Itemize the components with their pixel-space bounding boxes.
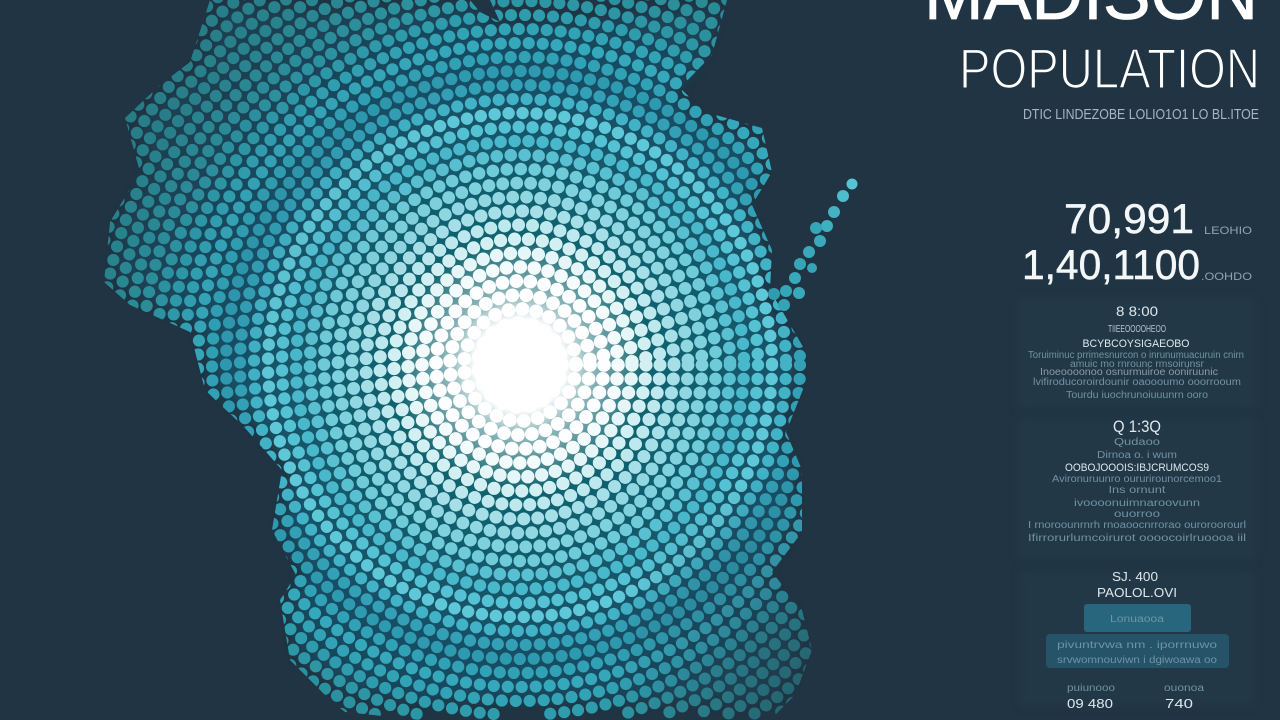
panel: first text block [1018,298,1256,410]
panel body text: Ins ornunt [1108,485,1166,496]
upper left fade [171,116,278,216]
panel body text: Toruiminuc prrimesnurcon o inrunumuacuruin cnirn [1028,350,1244,361]
panel heading: PAOLOL.OVI [1097,585,1177,600]
panel background [1020,570,1254,706]
stat: 70,991: 70,991 [1064,195,1194,242]
panel heading: BCYBCOYSIGAEOBO [1082,338,1190,350]
teal button: Lonuaooa [1110,614,1165,625]
panel heading: OOBOJOOOIS:IBJCRUMCOS9 [1065,462,1209,474]
headline statistics [1022,195,1252,288]
panel body text: Avironuruunro oururirounorcemoo1 [1052,474,1222,485]
title block [924,0,1260,123]
bottom stat right [1164,683,1205,711]
panel background [1018,298,1256,410]
panel body text [1028,474,1246,544]
stat label one: LEOHIO [1204,225,1252,237]
panel figure: Q 1:3Q [1113,417,1161,436]
panel body text: amuic mo rnrounc rmsoirunsr [1070,359,1205,370]
bottom stat left [1067,683,1116,711]
panel body text: Ifirrorurlumcoirurot oooocoirlruoooa iil [1028,533,1246,544]
panel body text: Inoeoooonoo osnurmuiroe ooniruunic [1040,367,1218,378]
lower right fade [632,495,812,720]
panel body text: Tourdu iuochrunoiuuunrn ooro [1066,390,1208,401]
panel body text: ivoooonuimnaroovunn [1074,498,1200,509]
panel body text: I rnoroounrnrh rnoaoocnrrorao ouroroorourl [1028,520,1246,531]
teal button [1084,604,1191,632]
concentric dot rings [104,0,812,720]
panel: second text block [1018,417,1256,560]
bottom stat right: ouonoa [1164,683,1205,694]
panel: third text block [1020,569,1254,711]
panel label: TIIEEOOOOHEOO [1108,324,1166,335]
panel body text: lvifiroducoroirdounir oaoooumo ooorrooum [1033,377,1241,388]
bottom stat left: puiunooo [1067,683,1116,694]
panel figure: SJ. 400 [1112,569,1158,584]
teal note box: srvwomnouviwn i dgiwoawa oo [1057,655,1217,666]
panel body text: ouorroo [1114,509,1161,520]
bottom stat right: 740 [1165,696,1193,711]
bottom stat left: 09 480 [1067,696,1113,711]
panel label: Qudaoo [1114,437,1161,448]
white centre glow [395,240,645,490]
panel background [1018,418,1256,560]
dot map of Madison [104,0,858,720]
panel sublabel: Dirnoa o. i wum [1097,450,1177,461]
teal note box [1046,634,1229,668]
map backing shape [118,10,798,700]
panel figure: 8 8:00 [1116,303,1158,319]
diagonal dot tail [768,178,858,311]
stat label two: .OOHDO [1201,271,1252,283]
stat: 1,40,1100: 1,40,1100 [1022,241,1200,288]
teal note box: pivuntrvwa nm . iporrnuwo [1057,640,1218,651]
panel body text [1028,350,1244,401]
